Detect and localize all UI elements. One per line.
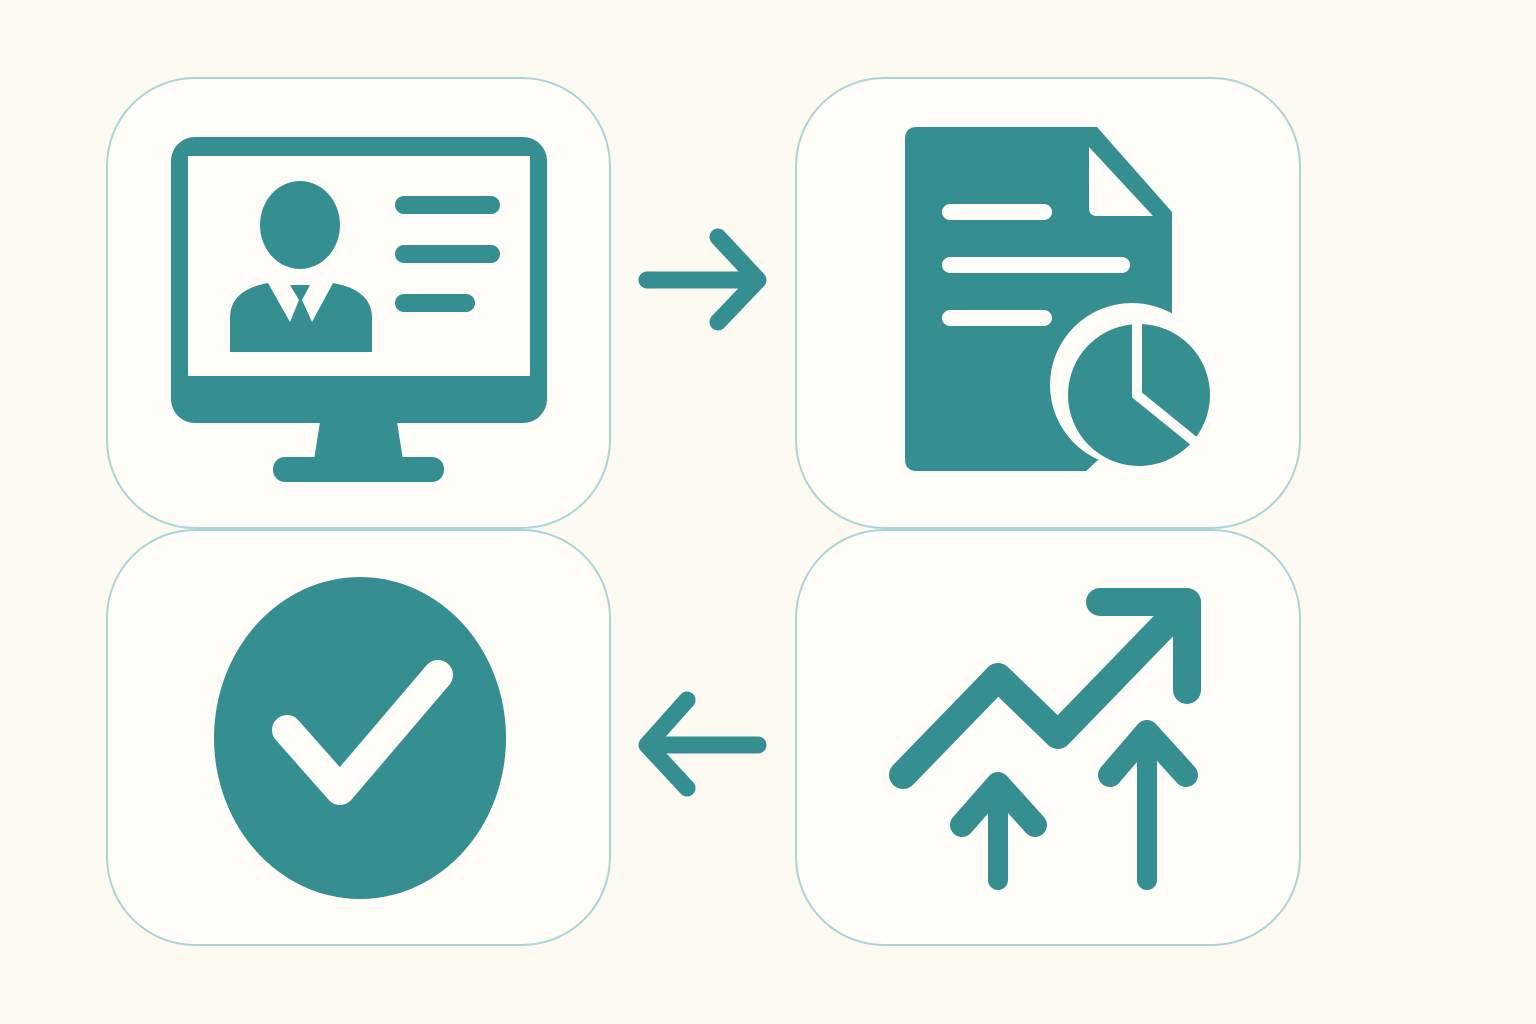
arrow: left (647, 700, 758, 788)
icon: check circle (214, 577, 506, 899)
panel: monitor profile (107, 78, 610, 528)
panel: growth (796, 530, 1300, 945)
icon: monitor with profile (171, 137, 547, 482)
icon: document with pie chart (905, 127, 1214, 480)
panel: document report (796, 78, 1300, 528)
panel: check (107, 530, 610, 945)
icon: rising trend with arrows (903, 602, 1187, 880)
arrow: right (647, 237, 758, 322)
